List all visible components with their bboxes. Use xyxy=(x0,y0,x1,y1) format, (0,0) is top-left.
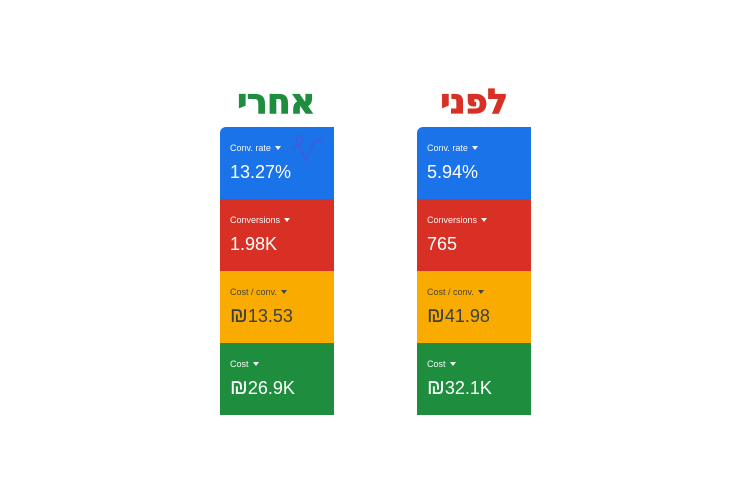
metric: conversions before: Conversions xyxy=(427,215,477,225)
metric: cost after: Cost xyxy=(230,359,249,369)
metric: cost before xyxy=(417,343,531,415)
metric: conversion rate before xyxy=(417,127,531,199)
metric: conversion rate before: Conv. rate xyxy=(427,143,468,153)
metric: conversions after: Conversions xyxy=(230,215,280,225)
icon: faint watermark scribble xyxy=(290,135,323,162)
metric: cost before: ₪32.1K xyxy=(427,376,492,399)
panel: after metrics xyxy=(220,127,334,415)
metric: conversions before: 765 xyxy=(427,234,457,254)
metric: conversions after: 1.98K xyxy=(230,234,277,254)
metric: conversions after xyxy=(220,199,334,271)
metric: cost per conversion before: ₪41.98 xyxy=(427,304,490,327)
metric: conversion rate after: Conv. rate xyxy=(230,143,271,153)
metric: cost per conversion after: Cost / conv. xyxy=(230,287,277,297)
metric: conversion rate after xyxy=(220,127,334,199)
metric: conversion rate before: 5.94% xyxy=(427,162,478,182)
metric: cost after: ₪26.9K xyxy=(230,376,295,399)
metric: conversion rate after: 13.27% xyxy=(230,162,291,182)
metric: cost per conversion after: ₪13.53 xyxy=(230,304,293,327)
heading: before (red): לפני xyxy=(440,82,508,122)
metric: cost before: Cost xyxy=(427,359,446,369)
metric: conversions before xyxy=(417,199,531,271)
metric: cost per conversion before xyxy=(417,271,531,343)
metric: cost per conversion after xyxy=(220,271,334,343)
heading: after (green): אחרי xyxy=(237,82,315,122)
panel: before metrics xyxy=(417,127,531,415)
metric: cost after xyxy=(220,343,334,415)
metric: cost per conversion before: Cost / conv. xyxy=(427,287,474,297)
